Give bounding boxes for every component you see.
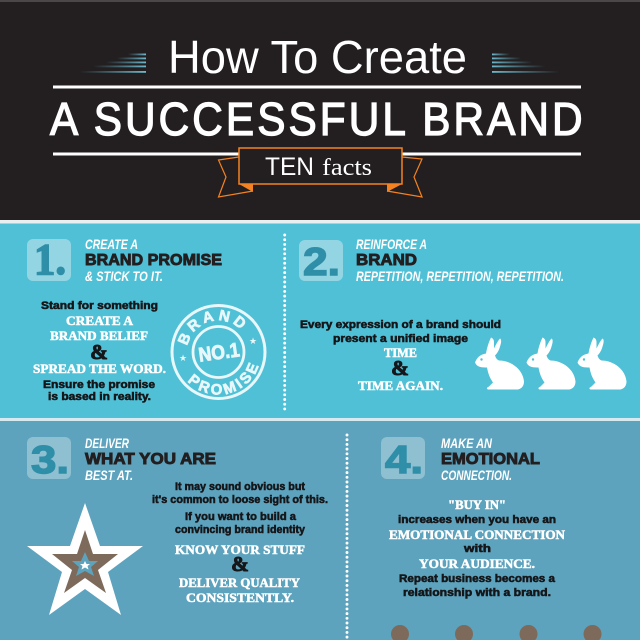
heading 2 (356, 236, 564, 284)
heading 4: EMOTIONAL (441, 451, 540, 468)
body text 2: & (391, 356, 409, 380)
body text 4: "BUY IN" (448, 498, 506, 512)
body text 4: YOUR AUDIENCE. (419, 557, 535, 571)
heading 4: MAKE AN (441, 435, 493, 451)
body text 4: Repeat business becomes a (399, 573, 556, 585)
heading 1 (85, 236, 222, 284)
stamp: brand promise no. 1 (170, 304, 266, 400)
body text 2: present a unified image (333, 333, 468, 345)
icon: layered star (27, 503, 143, 615)
body text 3: CONSISTENTLY. (186, 591, 294, 605)
header panel (0, 0, 640, 220)
heading 1: CREATE A (85, 236, 138, 252)
heading 3: WHAT YOU ARE (85, 451, 216, 468)
body text 1: SPREAD THE WORD. (33, 362, 166, 376)
body text 1: CREATE A (66, 314, 133, 328)
body text 1: Ensure the promise (43, 379, 155, 391)
panel: fact 1 (27, 235, 266, 403)
stamp: brand promise no. 1: ★ (249, 337, 257, 347)
heading 3 (85, 435, 216, 483)
stamp: brand promise no. 1: PROMISE (188, 362, 259, 395)
ribbon: ten facts: TEN (265, 153, 314, 181)
heading 3: DELIVER (85, 435, 130, 451)
body text 2: TIME (384, 346, 417, 360)
panel: fact 4 (381, 435, 602, 640)
heading 2: BRAND (356, 252, 417, 269)
body text 1: BRAND BELIEF (50, 329, 148, 343)
body text 1: Stand for something (41, 300, 158, 312)
divider dots top (283, 235, 286, 409)
number 4: 4. (385, 439, 423, 482)
ribbon: ten facts: facts (322, 155, 372, 181)
body text 2: TIME AGAIN. (358, 379, 443, 393)
body text 3 (152, 481, 328, 605)
icon: rabbit 2 (526, 338, 576, 390)
heading 1: BRAND PROMISE (85, 252, 222, 269)
body text 3: KNOW YOUR STUFF (175, 543, 305, 557)
body text 1: & (90, 340, 108, 364)
left speed lines (80, 54, 146, 73)
body text 2: Every expression of a brand should (300, 319, 501, 331)
stamp: brand promise no. 1: ★ (179, 354, 187, 364)
heading 2: REINFORCE A (356, 236, 427, 252)
body text 3: convincing brand identity (175, 524, 306, 536)
body text 3: & (231, 552, 249, 576)
body text 3: If you want to build a (185, 511, 297, 523)
heading 1: & STICK TO IT. (85, 268, 163, 284)
icon: rabbit 3 (578, 338, 626, 390)
body text 3: DELIVER QUALITY (179, 576, 300, 590)
heading 2: REPETITION, REPETITION, REPETITION. (356, 268, 564, 284)
body text 2 (300, 319, 501, 393)
body text 4: with (463, 543, 491, 555)
number 2: 2. (303, 241, 340, 284)
icon: rabbit 1 (475, 338, 524, 390)
ribbon: ten facts (218, 148, 422, 197)
body text 3: It may sound obvious but (175, 481, 305, 493)
divider dots bottom (346, 435, 348, 640)
heading 4 (441, 435, 540, 483)
body text 1 (33, 300, 166, 403)
heading 4: CONNECTION. (441, 467, 512, 483)
stamp: brand promise no. 1: NO.1 (197, 339, 241, 367)
right speed lines (492, 54, 559, 73)
heading 3: BEST AT. (85, 467, 133, 483)
stamp: brand promise no. 1: BRAND (177, 310, 246, 346)
body text 3: it's common to loose sight of this. (152, 494, 328, 506)
panel: fact 2 (27, 236, 626, 640)
number 3: 3. (31, 439, 69, 482)
body text 4: increases when you have an (398, 514, 556, 526)
panel: fact 1 and 2 background (0, 220, 640, 640)
body text 4: relationship with a brand. (403, 587, 551, 599)
panel: fact 3 (27, 435, 328, 615)
number 1: 1. (34, 235, 66, 284)
body text 4 (389, 498, 565, 599)
brown circles row (391, 625, 602, 640)
title line one: How To Create (168, 31, 467, 83)
body text 1: is based in reality. (48, 391, 151, 403)
title line two: A SUCCESSFUL BRAND (50, 94, 583, 145)
body text 4: EMOTIONAL CONNECTION (389, 528, 565, 542)
